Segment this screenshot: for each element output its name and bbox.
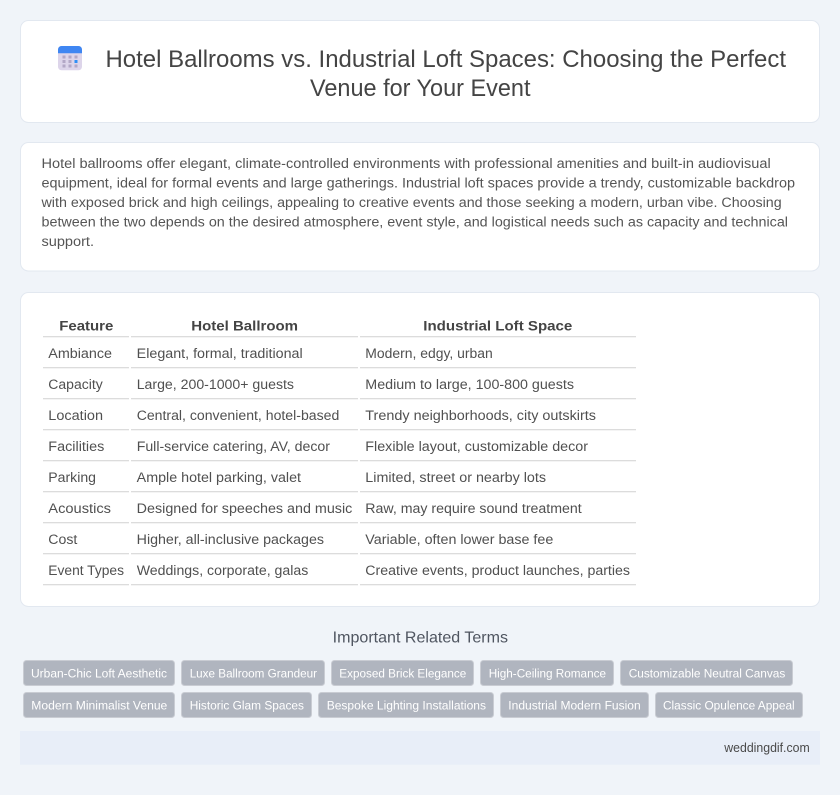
row: event types: Event Types (48, 563, 124, 579)
row: cost: Variable, often lower base fee (365, 532, 553, 548)
row: parking: Ample hotel parking, valet (137, 470, 301, 486)
intro text: Hotel ballrooms offer elegant, climate-controlled environments with professional amenities and built-in audiovisual (42, 156, 771, 172)
footer (20, 731, 820, 765)
tag (182, 660, 324, 686)
row: ambiance: Modern, edgy, urban (365, 346, 493, 362)
table header row (59, 318, 572, 334)
intro text: support. (42, 234, 94, 250)
table header row: Industrial Loft Space (423, 318, 572, 334)
row: ambiance: Ambiance (48, 346, 112, 362)
row: event types: Creative events, product launches, parties (365, 563, 630, 579)
tag: Modern Minimalist Venue (31, 698, 167, 712)
tag (24, 692, 174, 718)
tag (480, 660, 614, 686)
title: Hotel Ballrooms vs. Industrial Loft Spaces: Choosing the Perfect (106, 46, 786, 73)
tag: Classic Opulence Appeal (663, 698, 795, 712)
row: cost: Cost (48, 532, 77, 548)
tag (656, 692, 802, 718)
tag (24, 660, 174, 686)
row: location: Location (48, 408, 103, 424)
panel: comparison table (20, 292, 820, 606)
row: location (48, 408, 596, 424)
row: capacity: Capacity (48, 377, 104, 393)
row: capacity: Large, 200-1000+ guests (137, 377, 294, 393)
tag: Urban-Chic Loft Aesthetic (31, 666, 167, 680)
tag (318, 692, 494, 718)
row: acoustics (48, 501, 582, 517)
row: event types (48, 563, 630, 579)
tag (620, 660, 792, 686)
row: parking (48, 470, 546, 486)
tag (182, 692, 312, 718)
panel: title header (20, 20, 820, 122)
row: ambiance: Elegant, formal, traditional (137, 346, 303, 362)
tag (500, 692, 648, 718)
table header row: Feature (59, 318, 113, 334)
related term tags (24, 660, 802, 718)
icon: calendar (58, 46, 82, 70)
intro text: equipment, ideal for formal events and large gatherings. Industrial loft spaces provide a trendy, customizable backdrop (42, 176, 795, 192)
row: acoustics: Designed for speeches and music (137, 501, 352, 517)
row: parking: Parking (48, 470, 96, 486)
title (106, 46, 786, 102)
row: capacity (48, 377, 574, 393)
table header row: Hotel Ballroom (191, 318, 298, 334)
heading: related terms: Important Related Terms (333, 630, 508, 647)
row: ambiance (48, 346, 493, 362)
row: capacity: Medium to large, 100-800 guests (365, 377, 574, 393)
intro text (40, 156, 795, 250)
tag: Luxe Ballroom Grandeur (190, 666, 317, 680)
row: location: Trendy neighborhoods, city outskirts (365, 408, 596, 424)
title: Venue for Your Event (310, 75, 531, 102)
row: cost (48, 532, 553, 548)
row: location: Central, convenient, hotel-based (137, 408, 339, 424)
row: facilities: Flexible layout, customizable decor (365, 439, 588, 455)
row: facilities: Facilities (48, 439, 104, 455)
intro text: with exposed brick and high ceilings, appealing to creative events and those seeking a modern, urban vibe. Choosing (40, 195, 782, 211)
row: acoustics: Raw, may require sound treatment (365, 501, 582, 517)
row: cost: Higher, all-inclusive packages (137, 532, 324, 548)
intro text: between the two depends on the desired atmosphere, event style, and logistical needs such as capacity and technical (42, 214, 788, 230)
row: event types: Weddings, corporate, galas (137, 563, 308, 579)
row: facilities: Full-service catering, AV, decor (137, 439, 330, 455)
row: facilities (48, 439, 588, 455)
footer source text: weddingdif.com (723, 741, 810, 755)
row: parking: Limited, street or nearby lots (365, 470, 546, 486)
tag: Bespoke Lighting Installations (327, 698, 486, 712)
tag: Customizable Neutral Canvas (629, 666, 785, 680)
tag (332, 660, 474, 686)
tag: Exposed Brick Elegance (339, 666, 466, 680)
tag: Industrial Modern Fusion (508, 698, 641, 712)
row: acoustics: Acoustics (48, 501, 111, 517)
tag: High-Ceiling Romance (489, 666, 606, 680)
tag: Historic Glam Spaces (190, 698, 304, 712)
panel: introduction (20, 142, 820, 271)
